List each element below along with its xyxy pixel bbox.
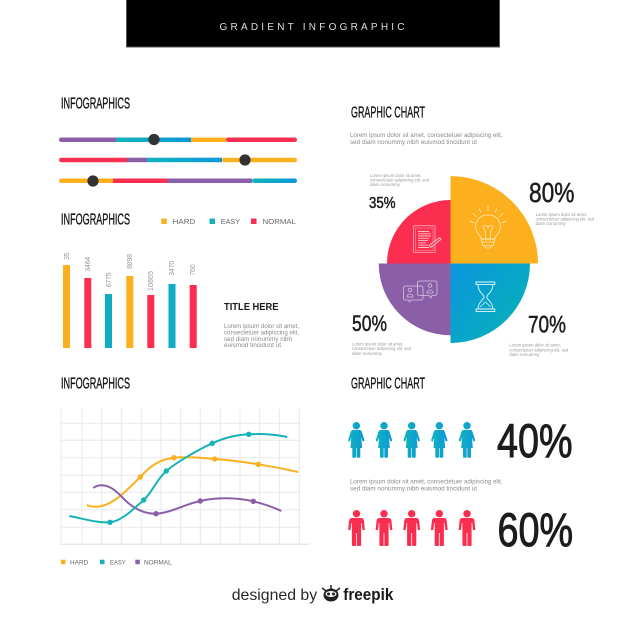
stat: 35%: Lorem ipsum dolor sit amet, — [370, 173, 422, 178]
heading: graphic chart top: GRAPHIC CHART — [351, 104, 425, 122]
bar values: 760 — [190, 264, 197, 276]
bar legend: EASY — [221, 217, 240, 226]
slider 2 — [59, 154, 297, 166]
title here text block: euismod tincidunt ut — [224, 343, 281, 349]
intro text: sed diam nonummy nibh euismod tincidunt ut — [350, 140, 477, 146]
intro text — [350, 133, 503, 146]
icons: five men — [348, 510, 475, 546]
sector: purple 50% — [379, 264, 450, 335]
bar legend: NORMAL — [262, 217, 296, 226]
line legend — [61, 560, 172, 566]
line legend: HARD — [70, 560, 89, 566]
bar values: 10865 — [148, 271, 155, 291]
slider 1 — [59, 134, 297, 145]
bar legend — [161, 217, 296, 226]
line: easy — [69, 432, 287, 525]
stat: 70%: 70% — [528, 312, 566, 338]
sector: yellow 80% — [450, 176, 538, 264]
people text: Lorem ipsum dolor sit amet, consectetuer adipiscing elit, — [350, 480, 503, 486]
footer credit: freepik — [343, 586, 394, 604]
title banner — [126, 0, 500, 47]
title here text block: sed diam nonummy nibh — [224, 337, 292, 343]
stat: 70%: Lorem ipsum dolor sit amet, — [509, 343, 561, 348]
heading: infographics sliders: INFOGRAPHICS — [61, 96, 130, 112]
bars — [63, 265, 197, 348]
panel: pie chart — [350, 104, 595, 357]
bar values: 3470 — [169, 261, 176, 276]
bar values — [64, 252, 197, 291]
bar values: 6775 — [106, 272, 113, 287]
title here text block: Lorem ipsum dolor sit amet, — [224, 324, 299, 330]
heading: graphic chart bottom: GRAPHIC CHART — [351, 376, 425, 392]
intro text: Lorem ipsum dolor sit amet, consectetuer adipiscing elit, — [350, 133, 503, 139]
panel: people chart — [348, 376, 573, 557]
people text — [350, 480, 503, 492]
icon: document and pen — [414, 226, 441, 252]
bar values: 3464 — [85, 257, 92, 272]
icon: hourglass — [476, 282, 495, 312]
title banner: GRADIENT INFOGRAPHIC — [220, 22, 404, 33]
panel: line chart — [61, 376, 309, 566]
footer credit: designed by — [232, 587, 317, 604]
icon: light bulb — [470, 206, 506, 248]
stat: 35%: diam nonummy — [370, 182, 401, 187]
stat: 40%: 40% — [497, 415, 572, 468]
line legend: EASY — [110, 560, 126, 566]
heading: infographics lines: INFOGRAPHICS — [61, 376, 130, 392]
icons: five women — [348, 422, 475, 458]
bar values: 8098 — [127, 254, 134, 269]
icon: freepik bee — [322, 585, 340, 602]
stat: 70% — [509, 312, 569, 357]
sector: blue 70% — [450, 264, 530, 343]
bar legend: HARD — [173, 217, 195, 226]
heading: infographics bars: INFOGRAPHICS — [61, 212, 130, 228]
stat: 50%: diam nonummy — [352, 351, 383, 356]
stat: 80%: 80% — [529, 177, 574, 208]
sector: red 35% — [387, 200, 450, 264]
footer credit — [232, 585, 394, 604]
title here text block: TITLE HERE — [224, 302, 279, 313]
stat: 80%: Lorem ipsum dolor sit amet, — [536, 212, 587, 217]
bar values: 35 — [64, 252, 71, 260]
stat: 80% — [529, 177, 595, 226]
slider 3 — [59, 175, 297, 187]
line: normal — [93, 485, 281, 516]
stat: 50% — [352, 311, 412, 356]
line: hard — [87, 455, 298, 507]
stat: 70%: diam nonummy — [509, 352, 540, 357]
stat: 35% — [369, 173, 430, 212]
stat: 60%: 60% — [498, 504, 573, 557]
stat: 50%: 50% — [352, 311, 387, 336]
stat: 35%: 35% — [369, 195, 396, 212]
stat: 80%: consectetuer adipiscing elit, sed — [536, 217, 595, 222]
title here text block: consectetuer adipiscing elit, — [224, 330, 299, 336]
icon: chat bubbles — [404, 281, 437, 302]
line legend: NORMAL — [144, 560, 172, 566]
title here text block — [224, 302, 299, 349]
stat: 35%: consectetuer adipiscing elit, sed — [370, 178, 430, 183]
stat: 50%: consectetuer adipiscing elit, sed — [352, 346, 412, 351]
stat: 50%: Lorem ipsum dolor sit amet, — [352, 342, 404, 347]
stat: 80%: diam nonummy — [536, 221, 567, 226]
panel: bar chart — [61, 212, 299, 349]
people text: sed diam nonummy nibh euismod tincidunt ut — [350, 486, 477, 492]
stat: 70%: consectetuer adipiscing elit, sed — [509, 347, 569, 352]
panel: sliders — [59, 96, 297, 187]
